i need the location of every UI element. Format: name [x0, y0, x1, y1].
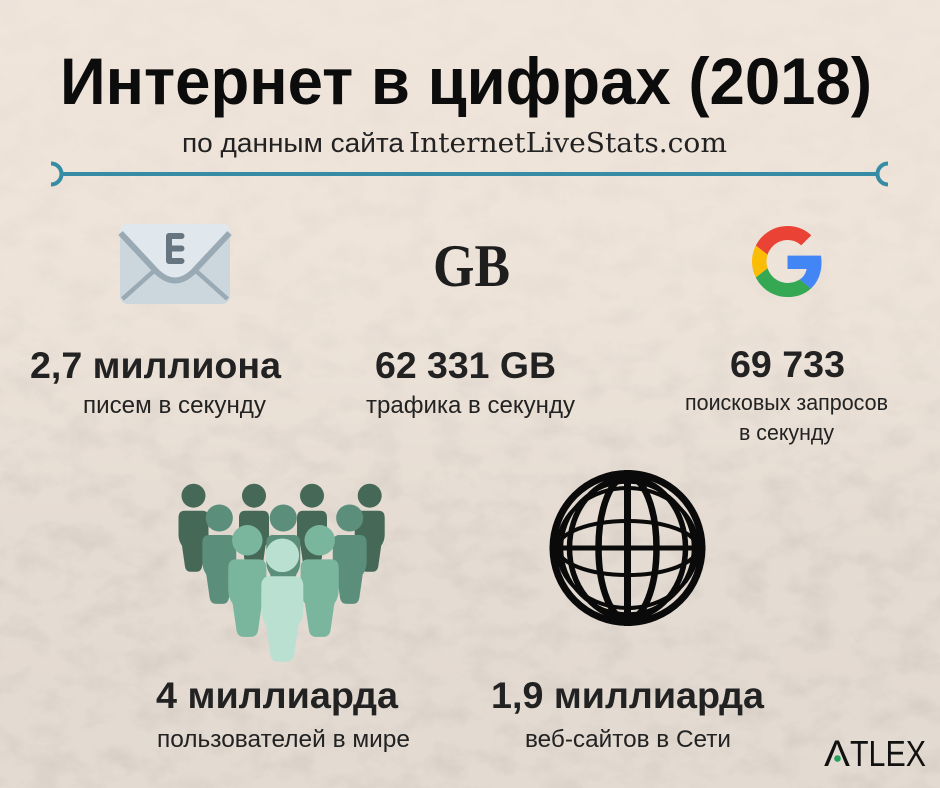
stat: traffic: 62 331 GB	[375, 345, 556, 386]
logo: ATLEX: TLEX	[850, 733, 926, 774]
stat: websites: веб-сайтов в Сети	[525, 726, 731, 753]
icon: crowd of people	[178, 484, 385, 662]
divider line	[51, 164, 888, 184]
stat: emails: 2,7 миллиона	[30, 345, 281, 386]
stat: searches: 69 733	[730, 344, 845, 385]
stat: searches: в секунду	[739, 420, 834, 445]
icon: envelope	[120, 224, 230, 304]
logo: ATLEX: Λ	[824, 733, 850, 774]
subtitle: InternetLiveStats.com	[409, 128, 727, 159]
subtitle	[182, 128, 727, 159]
logo: ATLEX	[824, 733, 926, 774]
title: Интернет в цифрах (2018)	[60, 44, 872, 118]
icon: Google G	[752, 226, 822, 297]
stat: users: пользователей в мире	[157, 726, 410, 753]
icon: GB: GB	[433, 233, 510, 299]
icon: globe	[550, 470, 706, 626]
subtitle: по данным сайта	[182, 128, 405, 158]
stat: traffic	[366, 345, 575, 419]
stat: users: 4 миллиарда	[156, 675, 398, 716]
stat: emails: писем в секунду	[83, 392, 266, 419]
stat: traffic: трафика в секунду	[366, 392, 575, 419]
stat: emails	[30, 345, 281, 419]
stat: users	[156, 675, 410, 753]
stat: searches	[685, 344, 888, 445]
stat: websites	[491, 675, 764, 753]
stat: websites: 1,9 миллиарда	[491, 675, 764, 716]
stat: searches: поисковых запросов	[685, 390, 888, 415]
